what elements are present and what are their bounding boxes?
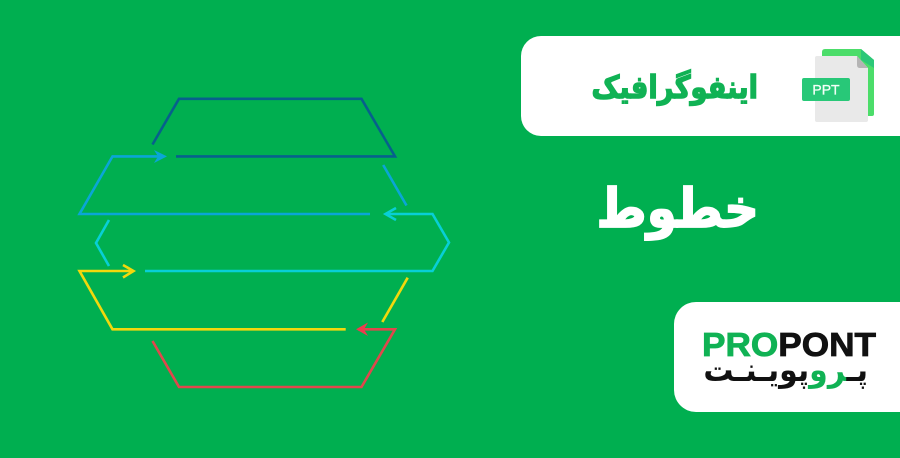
diagram: interlocking colored line shapes (80, 99, 449, 387)
heading: infographic label: اینفوگرافیک (591, 69, 758, 105)
line shape: yellow band with right arrow (80, 265, 408, 329)
line shape: cyan hexagon band with left arrow (96, 208, 449, 271)
logo: PROPONT wordmark: PROPONT (702, 326, 876, 363)
line shape: blue band with right arrow (80, 150, 406, 214)
logo: Persian wordmark: پـروپویـنـت (703, 352, 868, 389)
panel: logo card (674, 302, 900, 412)
icon: PPT file (802, 49, 874, 122)
line shape: dark blue trapezoid (152, 99, 395, 156)
line shape: red trapezoid with left arrow (152, 322, 395, 387)
icon: PPT file: PPT (812, 82, 840, 98)
panel: infographic header card (521, 36, 900, 136)
title: lines: خطوط (597, 177, 759, 241)
